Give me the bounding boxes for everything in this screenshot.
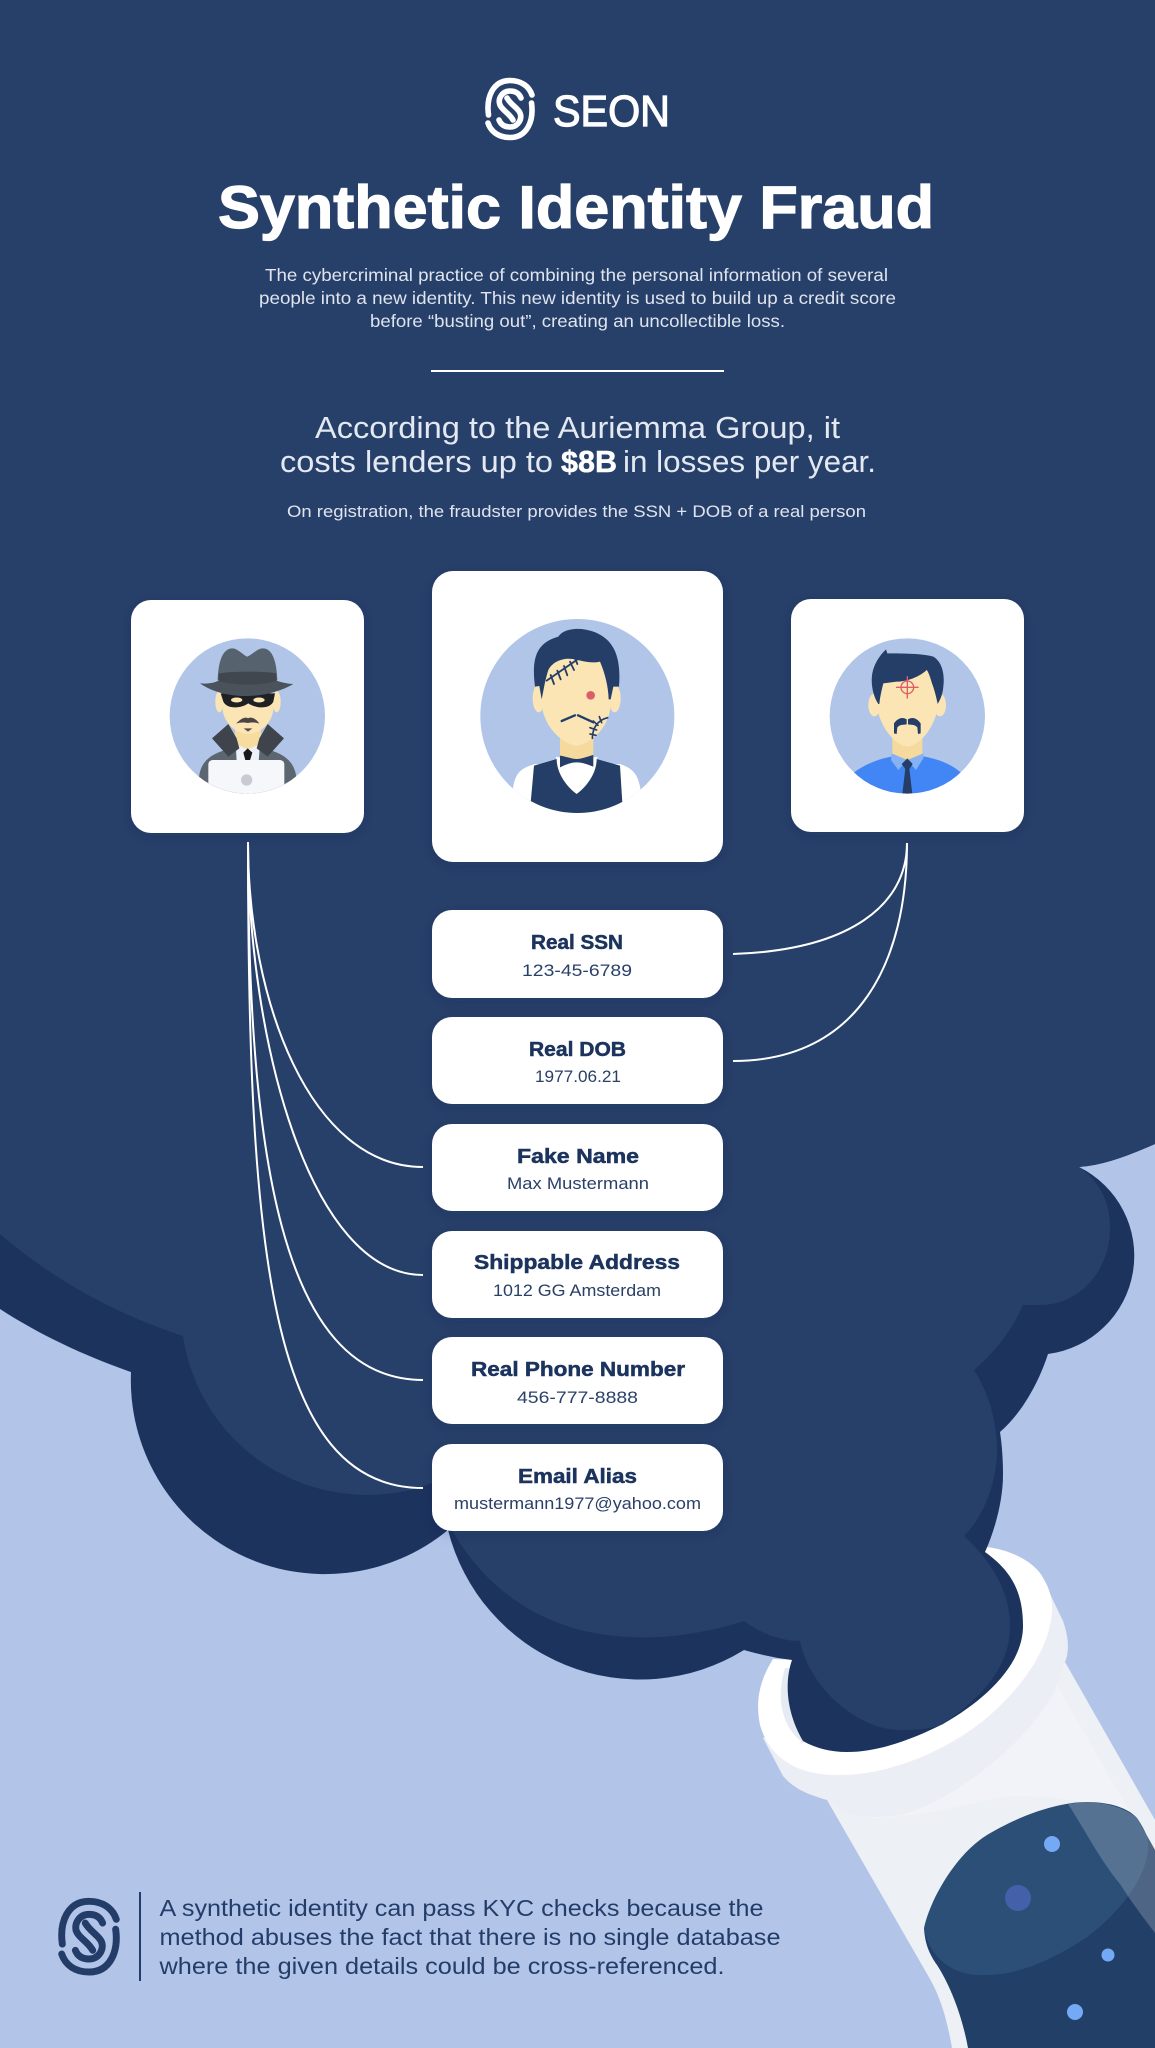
description: before “busting out”, creating an uncollectible loss. [370,311,785,331]
description: The cybercriminal practice of combining the personal information of several [265,265,888,285]
panel: fraudster [131,600,364,833]
card: Real DOB: Real DOB [529,1039,626,1061]
panel: real person [791,599,1024,832]
liquid body [924,1818,1155,2048]
statistic statement: $8B [561,444,617,479]
forehead stitches [547,658,577,684]
panel: synthetic identity [432,571,723,862]
card: Real Phone Number: Real Phone Number [471,1359,685,1381]
icon: stitched avatar [480,619,674,827]
icon: spy avatar [170,638,325,800]
connectors: fraudster to fake details [248,842,423,1488]
logo mark [488,80,532,138]
statistic statement: costs lenders up to [280,444,553,479]
footer text [158,1895,781,1979]
registration note: On registration, the fraudster provides the SSN + DOB of a real person [287,503,866,521]
glass reflection [1068,1802,1155,1933]
target reticle [896,676,919,699]
statistic statement: According to the Auriemma Group, it [315,410,840,445]
description [259,265,896,331]
rim side [763,1573,1068,1817]
card: Real DOB [432,1017,723,1104]
rim inner shadow [781,1668,830,1743]
bubbles [1005,1836,1114,2020]
statistic statement [280,410,876,479]
card: Fake Name [432,1124,723,1211]
title: Synthetic Identity Fraud [218,174,934,241]
tube glass [827,1662,1155,2048]
card: Shippable Address: 1012 GG Amsterdam [493,1281,661,1300]
card: Real SSN: Real SSN [531,932,623,954]
card: Real SSN [432,910,723,998]
cheek stitches [590,717,608,738]
card: Email Alias: mustermann1977@yahoo.com [454,1494,701,1513]
liquid surface [924,1802,1148,1975]
icon: SEON mark [62,1901,116,1972]
test tube bottle [758,1547,1155,2048]
rim top [758,1547,1052,1775]
card: Shippable Address [432,1231,723,1318]
tube inner highlight [870,1685,1140,1830]
footer text: method abuses the fact that there is no single database [160,1924,781,1950]
card: Real Phone Number [432,1337,723,1424]
card: Email Alias [432,1444,723,1531]
card: Real DOB: 1977.06.21 [535,1067,621,1086]
card: Email Alias: Email Alias [518,1466,637,1488]
description: people into a new identity. This new identity is used to build up a credit score [259,288,896,308]
footer text: A synthetic identity can pass KYC checks because the [160,1895,764,1921]
SEON logo [488,80,670,138]
footer text: where the given details could be cross-referenced. [158,1953,724,1979]
card: Fake Name: Max Mustermann [507,1174,649,1193]
icon: targeted avatar [830,638,985,803]
statistic statement: in losses per year. [623,444,876,479]
logo word: SEON [553,87,670,136]
footer callout [62,1892,781,1981]
connectors: real person to real details [733,843,907,1061]
card: Fake Name: Fake Name [517,1146,639,1168]
card: Real Phone Number: 456-777-8888 [517,1388,638,1407]
card: Shippable Address: Shippable Address [474,1252,680,1274]
card: Real SSN: 123-45-6789 [522,961,632,980]
